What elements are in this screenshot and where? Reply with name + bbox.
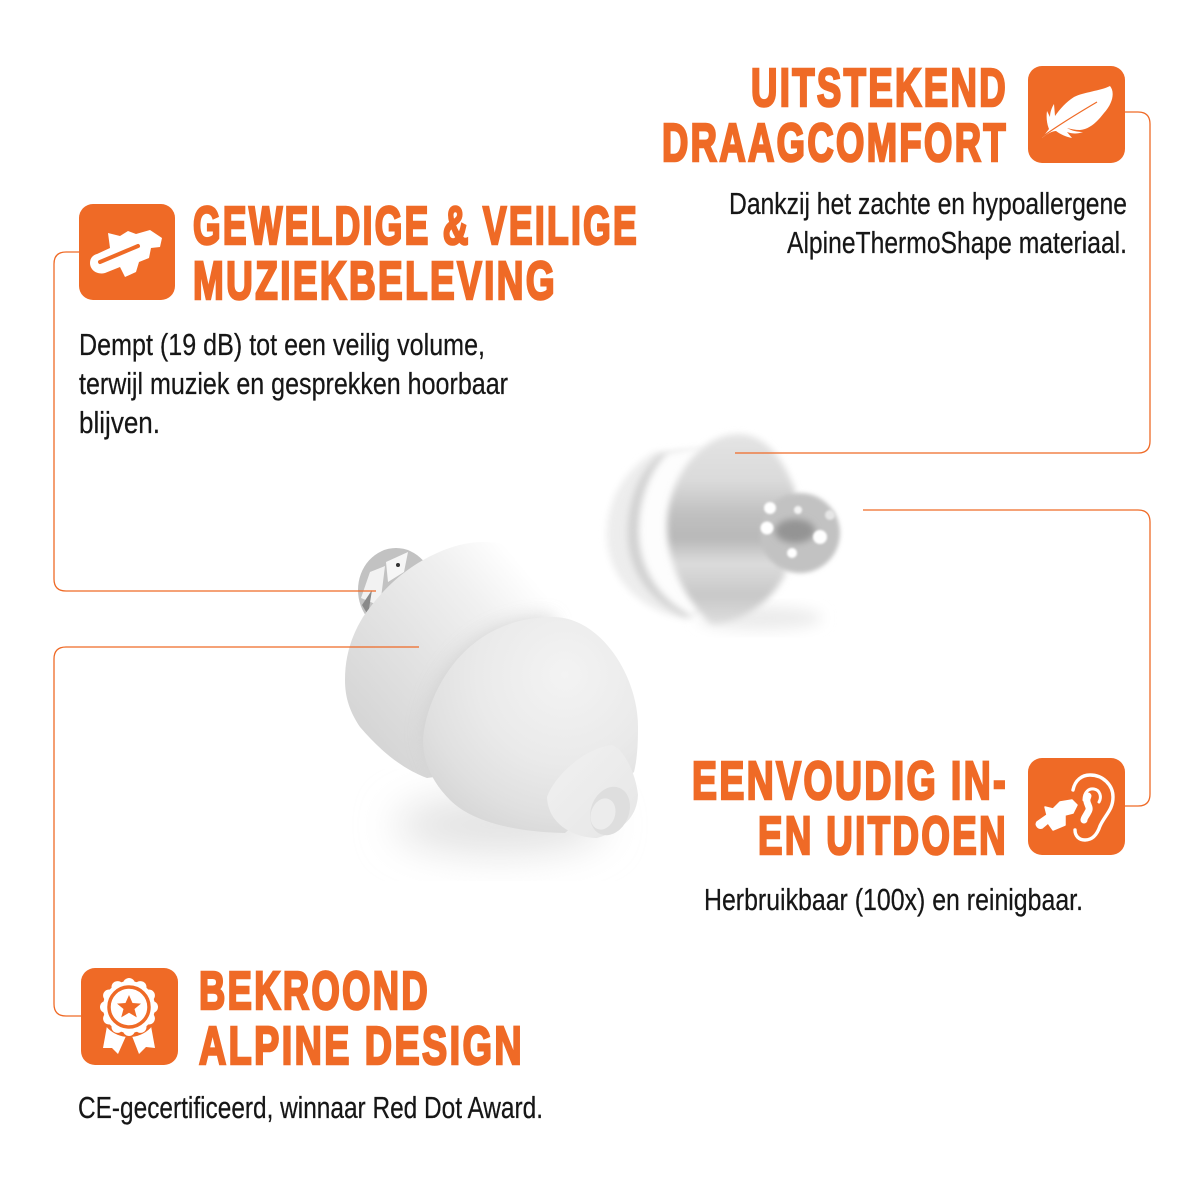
connector: draagcomfort to rear earplug xyxy=(735,112,1150,453)
heading: GEWELDIGE & VEILIGE xyxy=(193,196,639,256)
text block: blijven. xyxy=(79,405,160,440)
heading: EENVOUDIG IN- xyxy=(692,751,1008,811)
text block: terwijl muziek en gesprekken hoorbaar xyxy=(79,366,508,401)
text block: Dempt (19 dB) tot een veilig volume, xyxy=(79,327,485,362)
text block xyxy=(79,327,508,440)
heading: UITSTEKEND xyxy=(751,58,1008,118)
heading: ALPINE DESIGN xyxy=(199,1016,524,1076)
heading: BEKROOND xyxy=(199,961,430,1021)
text block: Herbruikbaar (100x) en reinigbaar. xyxy=(704,882,1083,917)
icon: earplug xyxy=(79,204,175,300)
metal filter xyxy=(358,548,434,632)
heading xyxy=(193,196,639,311)
front earplug xyxy=(345,542,638,853)
panel: geweldige en veilige muziekbeleving xyxy=(79,196,639,440)
heading xyxy=(662,58,1008,173)
panel: bekroond alpine design xyxy=(78,961,543,1125)
heading xyxy=(199,961,524,1076)
panel: uitstekend draagcomfort xyxy=(662,58,1127,260)
heading xyxy=(692,751,1008,866)
icon: award rosette xyxy=(81,968,178,1065)
heading: EN UITDOEN xyxy=(758,806,1008,866)
connector: muziekbeleving to filter xyxy=(54,252,376,591)
icon: feather xyxy=(1028,66,1125,163)
text block xyxy=(729,186,1127,260)
heading: MUZIEKBELEVING xyxy=(193,251,557,311)
rear earplug xyxy=(607,434,840,630)
text block: CE-gecertificeerd, winnaar Red Dot Award. xyxy=(78,1090,543,1125)
panel: eenvoudig in- en uitdoen xyxy=(692,751,1125,917)
heading: DRAAGCOMFORT xyxy=(662,113,1008,173)
product photo: earplugs xyxy=(345,434,840,853)
connector: in- en uitdoen to filter head xyxy=(863,510,1150,806)
icon: ear with earplug xyxy=(1028,758,1125,855)
connector: design to earplug body xyxy=(54,647,419,1016)
